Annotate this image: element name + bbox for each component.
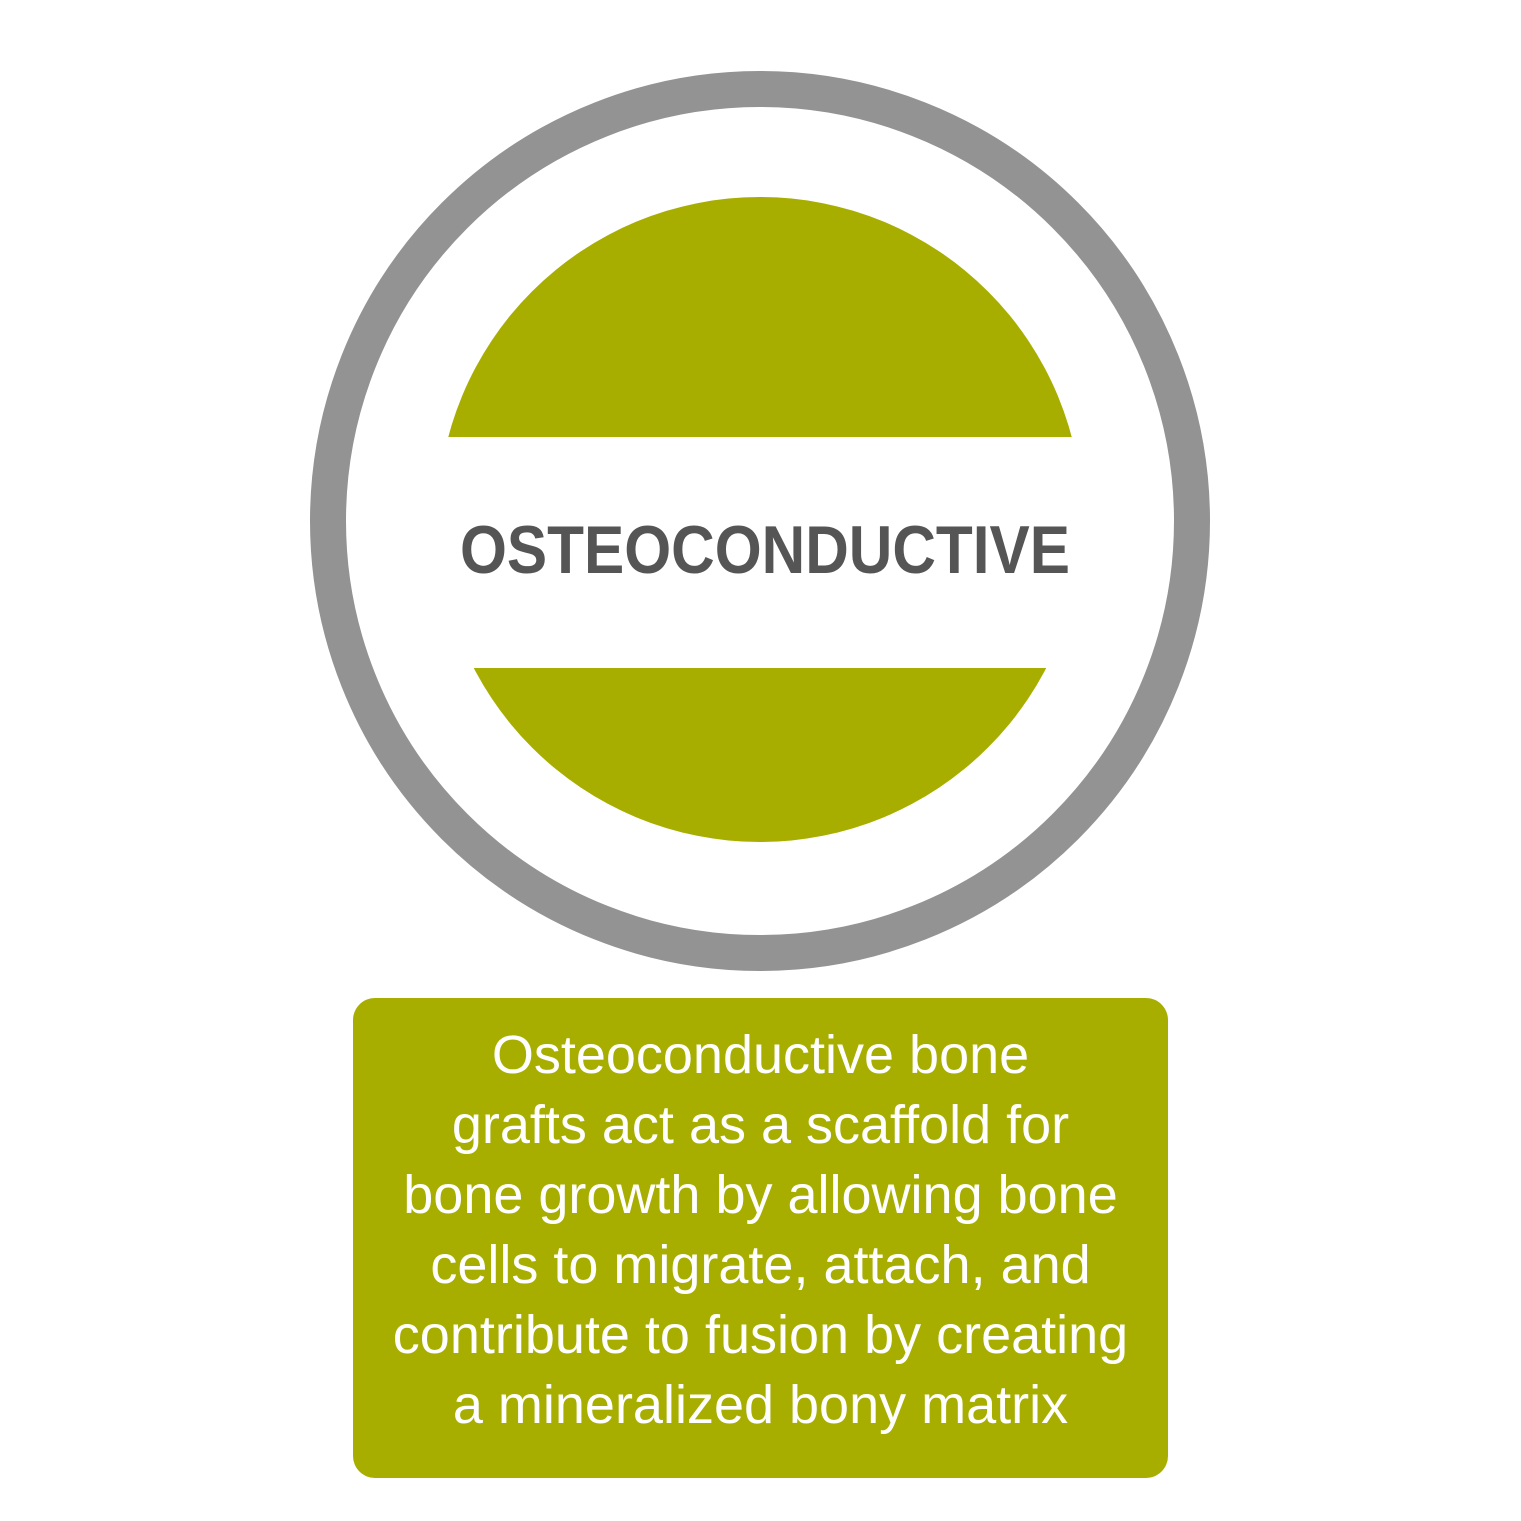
description box: cells to migrate, attach, and	[430, 1235, 1091, 1295]
description box: Osteoconductive bone	[492, 1025, 1029, 1085]
description box: grafts act as a scaffold for	[452, 1095, 1069, 1155]
emblem: ring with green segments	[310, 71, 1210, 971]
ring	[328, 89, 1192, 953]
description box: contribute to fusion by creating	[393, 1305, 1128, 1365]
green segments	[448, 197, 1072, 842]
description box: bone growth by allowing bone	[403, 1165, 1118, 1225]
description box	[353, 998, 1168, 1478]
description box: a mineralized bony matrix	[453, 1375, 1068, 1435]
title: OSTEOCONDUCTIVE	[460, 512, 1070, 588]
